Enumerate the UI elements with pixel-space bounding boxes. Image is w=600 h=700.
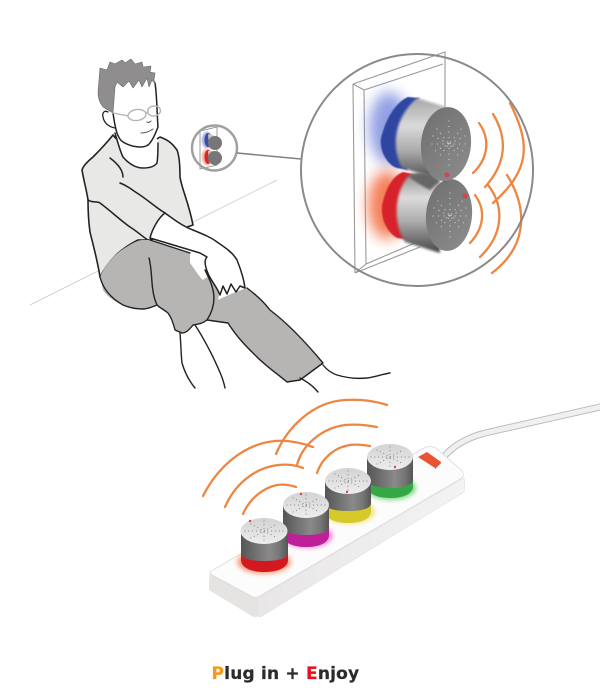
strip top bbox=[210, 446, 463, 598]
small inset circle bbox=[192, 126, 237, 170]
strip end face bbox=[209, 572, 259, 617]
face bbox=[113, 83, 158, 147]
shirt sleeve bbox=[88, 158, 165, 240]
forearm and hand bbox=[150, 213, 245, 295]
wall plate bbox=[353, 52, 445, 273]
small red glow and speaker bbox=[202, 149, 222, 165]
floor line bbox=[30, 180, 277, 305]
speaker 4 green bbox=[366, 444, 416, 500]
connector line bbox=[237, 153, 301, 159]
trouser outlines bbox=[100, 240, 323, 382]
blue glow bbox=[369, 92, 409, 164]
caption: Plug in + Enjoy bbox=[212, 664, 359, 684]
top speaker bbox=[381, 97, 474, 183]
sound waves: strip bbox=[203, 400, 387, 514]
person bbox=[82, 59, 390, 392]
ear bbox=[103, 111, 115, 128]
speaker 3 yellow bbox=[323, 468, 375, 524]
power strip bbox=[209, 446, 465, 617]
lower legs and foot bbox=[180, 325, 390, 392]
zoomed detail circle bbox=[301, 52, 533, 286]
glasses bbox=[113, 105, 161, 122]
power cord bbox=[442, 407, 600, 459]
trousers bbox=[100, 240, 323, 382]
hair bbox=[98, 59, 155, 113]
red status dots bbox=[444, 172, 450, 178]
small blue glow and speaker bbox=[202, 132, 222, 150]
switch bbox=[418, 452, 441, 468]
speaker 2 magenta bbox=[281, 492, 333, 548]
speaker 1 red bbox=[237, 518, 291, 574]
sound waves: detail bbox=[470, 103, 524, 273]
neck and collar bbox=[115, 128, 158, 168]
mouth and nose bbox=[141, 121, 153, 133]
bottom speaker bbox=[382, 172, 475, 253]
strip long side bbox=[258, 478, 465, 617]
shirt bbox=[82, 135, 193, 277]
small wall plate bbox=[200, 127, 217, 169]
red glow bbox=[368, 171, 406, 239]
